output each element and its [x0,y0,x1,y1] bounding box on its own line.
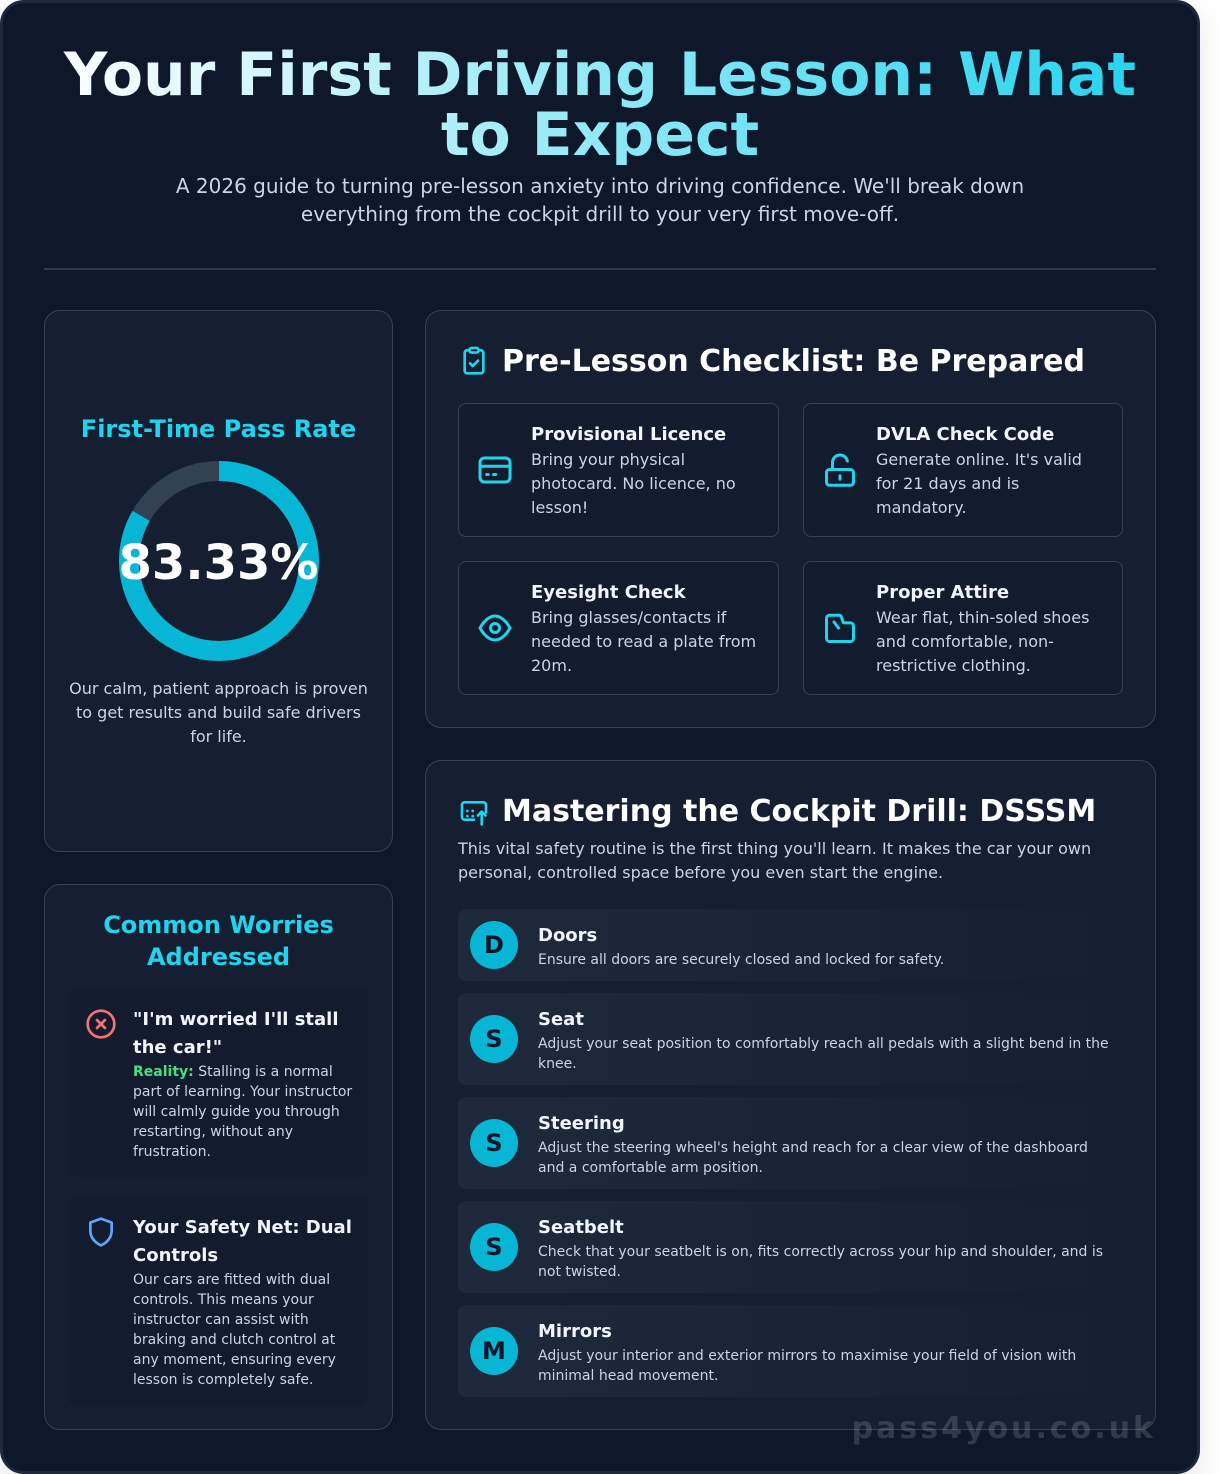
step text [538,1036,1109,1072]
heading: cockpit drill: Mastering the Cockpit Drill: DSSSM [502,794,1096,829]
step: mirrors [458,1305,1123,1397]
step text: Check that your seatbelt is on, fits correctly across your hip and shoulder, and is [538,1244,1103,1260]
icon: shield [89,1217,113,1247]
badge S [470,1119,518,1167]
panel: checklist [425,310,1156,728]
item text [531,450,736,517]
item text: mandatory. [876,498,966,517]
worry heading: "I'm worried I'll stall [133,1009,339,1030]
item title: Provisional Licence [531,424,726,445]
worry: dual controls [68,1197,368,1405]
icon: eye [478,614,512,642]
checklist item: eyesight [458,561,779,695]
item text: Bring glasses/contacts if [531,608,726,627]
panel: common worries [44,884,393,1430]
step text: not twisted. [538,1264,621,1280]
panel: cockpit drill [425,760,1156,1430]
watermark: pass4you.co.uk [852,1411,1156,1446]
pass rate description: Our calm, patient approach is proven [69,679,368,698]
worry heading [133,1009,339,1058]
worry heading: the car!" [133,1037,222,1058]
checklist item: check code [803,403,1123,537]
worry heading: Your Safety Net: Dual [133,1217,352,1238]
item text: photocard. No licence, no [531,474,736,493]
badge M [470,1327,518,1375]
worry text: lesson is completely safe. [133,1372,314,1388]
badge S: S [485,1233,503,1261]
step title: Doors [538,925,597,946]
item text: restrictive clothing. [876,656,1031,675]
worry: stalling [68,989,368,1177]
badge D: D [484,931,504,959]
worry text [133,1272,336,1388]
icon: x circle [86,1009,116,1039]
item text: for 21 days and is [876,474,1019,493]
step text: Adjust your seat position to comfortably reach all pedals with a slight bend in the [538,1036,1109,1052]
drill intro [458,839,1091,882]
panel: pass rate [44,310,393,852]
title: to Expect [441,100,759,170]
badge S: S [485,1129,503,1157]
worry text: frustration. [133,1144,211,1160]
worry heading: Controls [133,1245,218,1266]
step title: Mirrors [538,1321,612,1342]
step text: knee. [538,1056,577,1072]
step text: Adjust your interior and exterior mirrors to maximise your field of vision with [538,1348,1076,1364]
heading: first-time pass rate: First-Time Pass Rate [81,415,356,443]
item text [876,608,1089,675]
icon: card [478,456,512,484]
item title: DVLA Check Code [876,424,1054,445]
icon: shoe [825,614,855,643]
step text: Adjust the steering wheel's height and reach for a clear view of the dashboard [538,1140,1088,1156]
checklist item: licence [458,403,779,537]
item text: Generate online. It's valid [876,450,1082,469]
step text: and a comfortable arm position. [538,1160,763,1176]
item text [531,608,756,675]
step text [538,1140,1088,1176]
badge S: S [485,1025,503,1053]
item text: and comfortable, non- [876,632,1054,651]
step text [538,1244,1103,1280]
pass rate description [69,679,368,746]
title [44,45,1156,165]
step title: Steering [538,1113,625,1134]
pass rate description: for life. [190,727,247,746]
badge S [470,1223,518,1271]
drill intro: This vital safety routine is the first thing you'll learn. It makes the car your own [458,839,1091,858]
step title: Seatbelt [538,1217,624,1238]
heading: common worries: Common Worries [103,911,334,939]
subtitle: A 2026 guide to turning pre-lesson anxiety into driving confidence. We'll break down [176,174,1024,198]
icon: cockpit [460,801,488,826]
step title: Seat [538,1009,584,1030]
worry text [133,1064,352,1160]
worry text: controls. This means your [133,1292,314,1308]
heading: checklist: Pre-Lesson Checklist: Be Prepared [502,344,1085,379]
item text: needed to read a plate from [531,632,756,651]
worry text: any moment, ensuring every [133,1352,336,1368]
title: Your First Driving Lesson: What [64,40,1136,110]
worry text: Our cars are fitted with dual [133,1272,330,1288]
worry text: restarting, without any [133,1124,293,1140]
step: doors [458,909,1123,981]
item text: Wear flat, thin-soled shoes [876,608,1089,627]
heading: common worries: Addressed [147,943,290,971]
worry heading [132,1217,352,1266]
step text: Ensure all doors are securely closed and locked for safety. [538,952,944,968]
worry text: braking and clutch control at [133,1332,335,1348]
item text: Bring your physical [531,450,685,469]
step: seatbelt [458,1201,1123,1293]
worry text: part of learning. Your instructor [133,1084,352,1100]
pass rate description: to get results and build safe drivers [76,703,361,722]
worry text: instructor can assist with [133,1312,309,1328]
step text: minimal head movement. [538,1368,718,1384]
heading: common worries [103,911,334,971]
icon: open lock [825,454,855,487]
badge S [470,1015,518,1063]
donut chart 83.33% [119,461,319,661]
badge M: M [482,1337,506,1365]
item text: 20m. [531,656,572,675]
worry text: Reality: Stalling is a normal [133,1064,333,1080]
drill intro: personal, controlled space before you even start the engine. [458,863,943,882]
item text: lesson! [531,498,588,517]
item title: Proper Attire [876,582,1009,603]
stat: 83.33%: 83.33% [119,535,318,591]
item title: Eyesight Check [531,582,686,603]
badge D [470,921,518,969]
step: steering [458,1097,1123,1189]
icon: clipboard check [463,346,485,375]
item text [876,450,1082,517]
subtitle [176,174,1024,226]
step text [538,1348,1076,1384]
subtitle: everything from the cockpit drill to your very first move-off. [301,202,899,226]
worry text: will calmly guide you through [133,1104,340,1120]
checklist item: attire [803,561,1123,695]
step: seat [458,993,1123,1085]
